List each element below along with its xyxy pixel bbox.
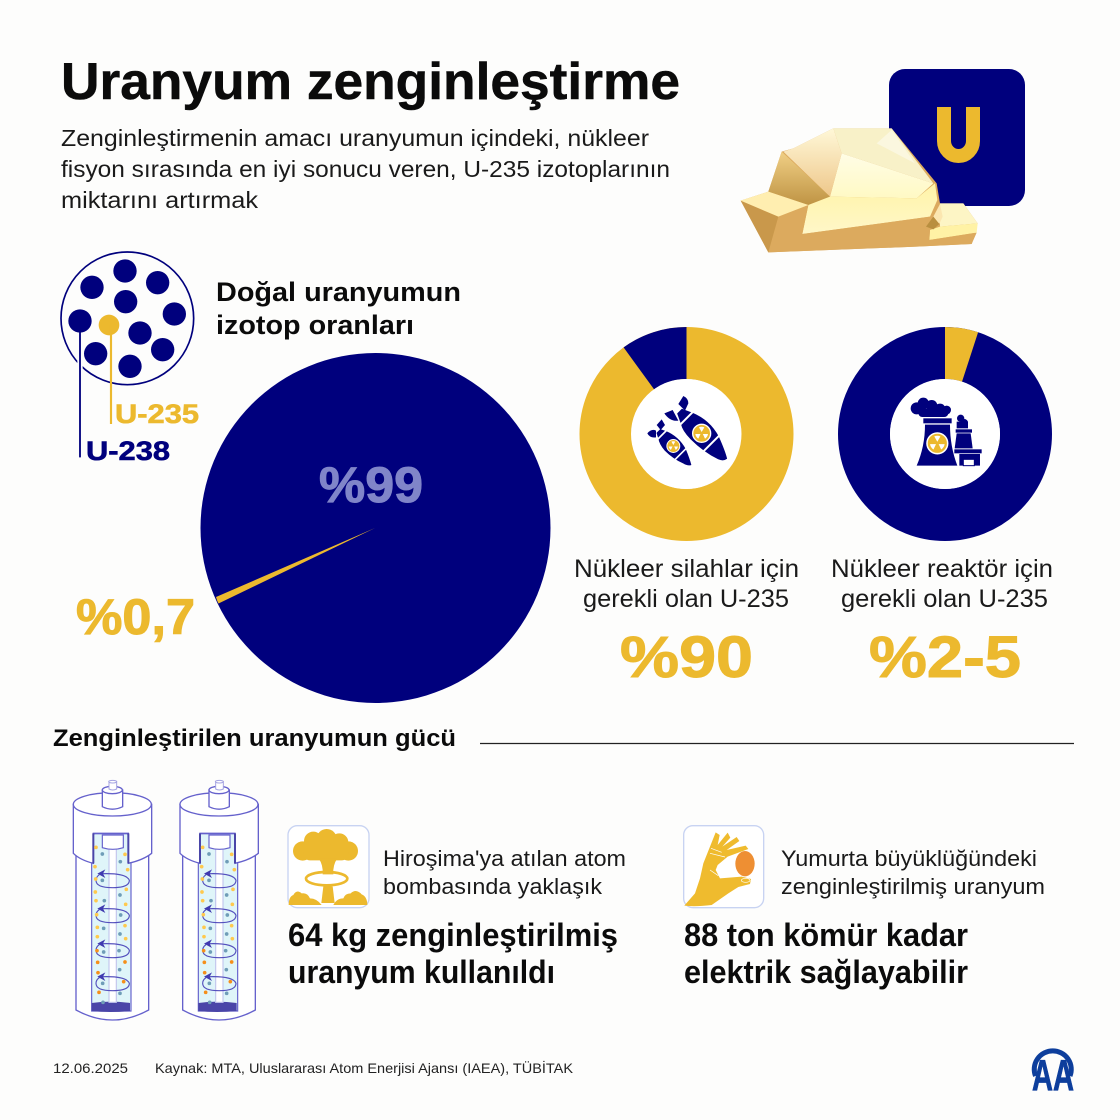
text: egg-sized: Yumurta büyüklüğündeki	[781, 846, 1037, 871]
text: Hiroshima: Hiroşima'ya atılan atom	[383, 846, 626, 871]
intro text: fisyon sırasında en iyi sonucu veren, U-235 izotoplarının	[61, 156, 670, 182]
label: U-238: U-238	[86, 436, 170, 466]
callout: 64 kg: 64 kg zenginleştirilmiş	[288, 917, 618, 953]
source: Kaynak: MTA, Uluslararası Atom Enerjisi Ajansı (IAEA), TÜBİTAK	[155, 1059, 574, 1076]
date: 12.06.2025	[53, 1060, 128, 1076]
callout: 64 kg: uranyum kullanıldı	[288, 954, 555, 990]
text: Hiroshima: bombasında yaklaşık	[383, 874, 603, 899]
text: egg-sized: zenginleştirilmiş uranyum	[781, 874, 1045, 899]
intro text: Zenginleştirmenin amacı uranyumun içindeki, nükleer	[61, 125, 649, 151]
caption: reactor: Nükleer reaktör için	[831, 555, 1053, 583]
icon: bombs	[647, 396, 737, 472]
icon: mushroom cloud	[288, 826, 369, 908]
logo: AA	[1032, 1051, 1074, 1100]
value: %0,7: %0,7	[76, 589, 195, 645]
heading: natural uranium isotope ratios: izotop oranları	[216, 310, 414, 340]
logo: AA: AA	[1032, 1051, 1074, 1100]
intro text	[61, 125, 670, 213]
pie chart: natural uranium	[200, 353, 550, 703]
caption: reactor	[831, 555, 1053, 613]
icon: uranium nugget	[741, 128, 978, 252]
callout: 88 tons: 88 ton kömür kadar	[684, 917, 968, 953]
callout: 88 tons	[684, 917, 968, 990]
callout: 88 tons: elektrik sağlayabilir	[684, 954, 968, 990]
donut chart: reactor	[864, 327, 1026, 515]
caption: reactor: gerekli olan U-235	[841, 585, 1048, 613]
icon: nuclear plant	[911, 398, 982, 466]
section heading: Zenginleştirilen uranyumun gücü	[53, 725, 456, 752]
label: U-235: U-235	[115, 399, 199, 429]
caption: weapons: Nükleer silahlar için	[574, 555, 799, 583]
illustration: centrifuges	[73, 780, 258, 1020]
icon: uranium element tile	[889, 69, 1025, 206]
callout: 64 kg	[288, 917, 618, 990]
caption: weapons	[574, 555, 799, 613]
text: Hiroshima	[383, 846, 626, 899]
title: Uranyum zenginleştirme	[61, 53, 680, 111]
icon: hand with egg	[684, 826, 764, 908]
value: %2-5: %2-5	[869, 625, 1021, 690]
intro text: miktarını artırmak	[61, 187, 258, 213]
caption: weapons: gerekli olan U-235	[583, 585, 789, 613]
pie chart: natural uranium: %99	[319, 457, 423, 513]
heading: natural uranium isotope ratios	[216, 277, 461, 340]
donut chart: weapons	[606, 327, 768, 515]
icon: atom isotope diagram	[61, 252, 194, 457]
heading: natural uranium isotope ratios: Doğal uranyumun	[216, 277, 461, 307]
value: %90: %90	[620, 625, 753, 690]
text: egg-sized	[781, 846, 1045, 899]
